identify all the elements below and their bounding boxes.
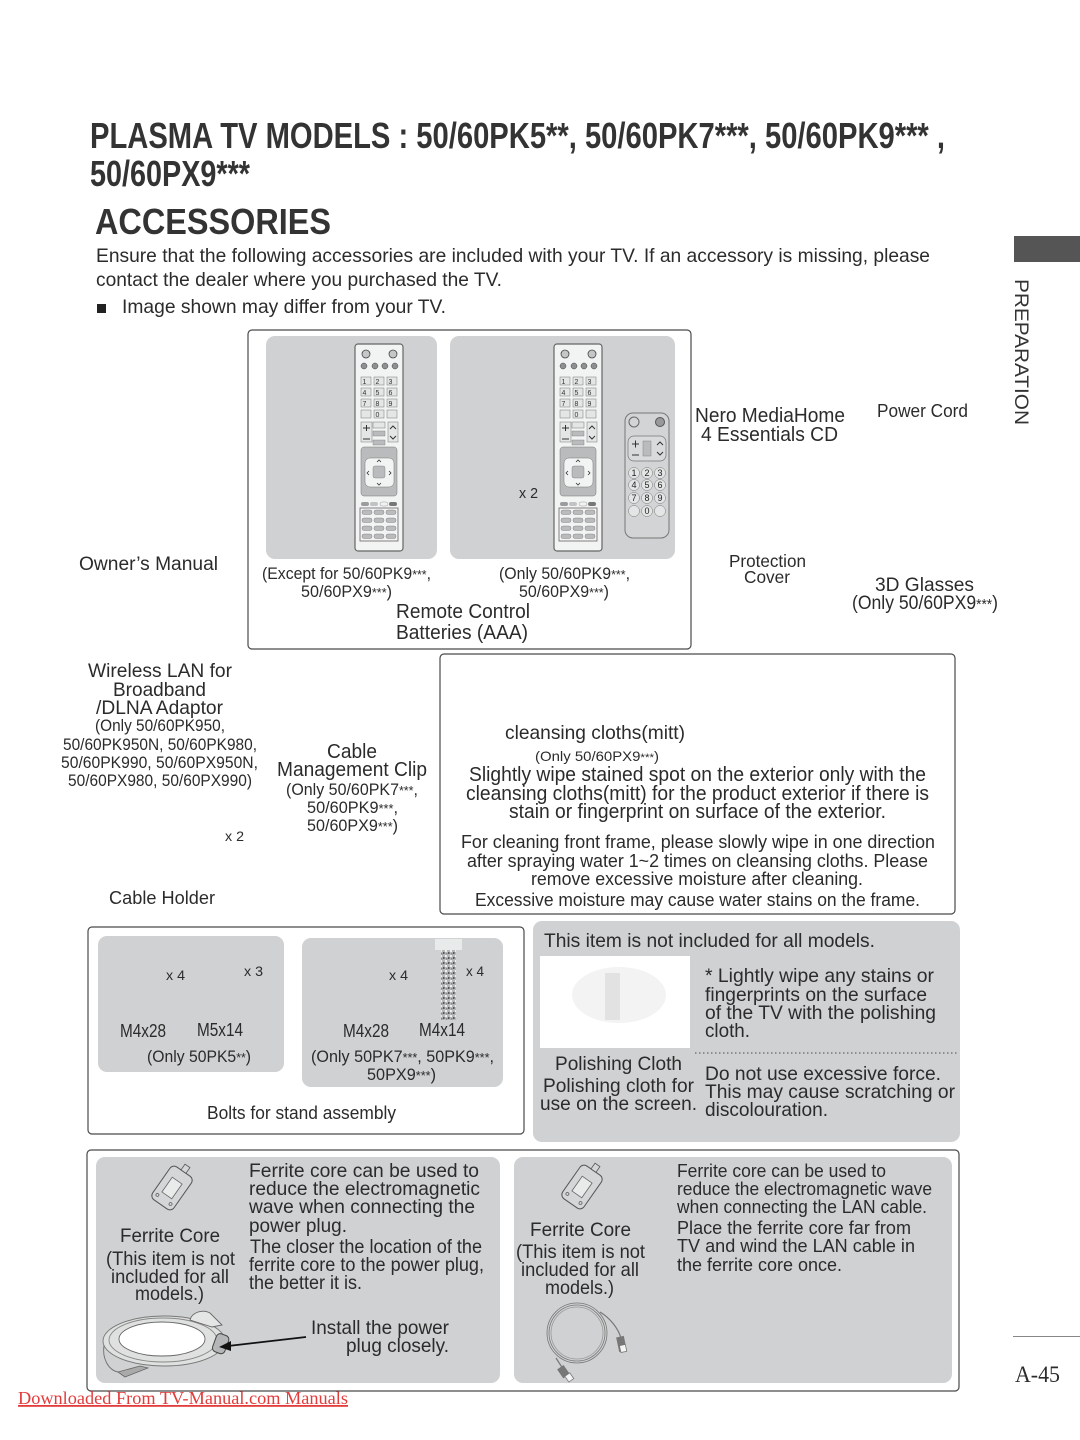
label: install closely: Install the power [311,1317,449,1339]
panel: 50PK7 50PK9 50PX9 bolts: M4x14 [419,1020,465,1040]
text: front frame instructions [461,831,935,910]
label: polishing cloth: Polishing cloth for [543,1075,694,1097]
remote captions: Remote Control [396,601,530,623]
label: wireless LAN adaptor: 50/60PK950N, 50/60PK980, [63,735,257,754]
label: protection cover: Cover [744,567,790,587]
panel: 50PK5 bolts: x 3 [244,963,263,979]
icon: ferrite core [150,1158,198,1212]
label: cable management clip: Cable [327,741,377,763]
icon: ferrite core [560,1157,608,1211]
label: ferrite core: (This item is not [516,1241,646,1263]
footer source link: Downloaded From TV-Manual.com Manuals [18,1388,348,1408]
caption: bolts: Bolts for stand assembly [207,1103,396,1123]
label: 3D glasses: 3D Glasses [875,575,974,596]
heading: cleansing cloths: cleansing cloths(mitt) [505,722,685,744]
label: wireless LAN adaptor: 50/60PK990, 50/60PX950N, [61,753,258,772]
text: ferrite LAN description [676,1160,932,1275]
panel: 50PK7 50PK9 50PX9 bolts [302,938,503,1087]
text: ferrite power plug description: the better it is. [249,1272,362,1294]
text: wipe instructions: Slightly wipe stained spot on the exterior only with the [469,764,926,786]
label: wireless LAN adaptor: 50/60PX980, 50/60PX990) [68,771,252,790]
label: ferrite core: Ferrite Core [530,1219,631,1241]
text: ferrite LAN description: reduce the electromagnetic wave [677,1178,932,1199]
text: wipe instructions: cleansing cloths(mitt) for the product exterior if there is [466,783,929,805]
label: ferrite core: included for all [521,1259,639,1281]
text: ferrite power plug description: Ferrite core can be used to [249,1160,479,1182]
remote captions: 50/60PX9***) [301,582,392,601]
label: ferrite core: models.) [545,1277,614,1299]
label: polishing cloth: Polishing Cloth [555,1053,682,1075]
text: force warning: Do not use excessive force. [705,1063,941,1085]
icon: small remote: 6 [657,480,663,490]
panel: 50PK7 50PK9 50PX9 bolts: x 4 [466,963,484,979]
label: 3D glasses: (Only 50/60PX9***) [852,593,998,614]
text: force warning: This may cause scratching or [705,1081,955,1103]
text: force warning [705,1063,955,1121]
page number: A-45 [1015,1362,1060,1387]
remote captions: (Only 50/60PK9***, [499,564,630,583]
text: wipe tip: fingerprints on the surface [705,984,927,1006]
panel: 50PK5 bolts: x 4 [166,967,185,983]
text: ferrite LAN description: when connecting the LAN cable. [676,1196,927,1217]
icon: LAN cable [547,1303,627,1382]
text: wipe tip: of the TV with the polishing [705,1002,936,1024]
label: ferrite core: models.) [135,1283,204,1305]
icon: small remote: 7 [631,493,637,503]
panel: standard remote [266,336,437,559]
label: cable holder quantity: x 2 [225,828,244,844]
text: front frame instructions: after spraying water 1~2 times on cleansing cloths. Please [467,850,928,871]
label: cable management clip: Management Clip [277,759,427,781]
panel: ferrite cores [87,1150,959,1391]
text: wipe instructions: stain or fingerprint on surface of the exterior. [509,801,886,823]
text: front frame instructions: remove excessive moisture after cleaning. [531,868,863,889]
label: ferrite core: (This item is not [106,1248,236,1270]
icon: small remote: 2 [644,468,650,478]
panel: 50PK7 50PK9 50PX9 bolts: (Only 50PK7***, 50PK9***, [311,1047,494,1066]
panel: 50PK7 50PK9 50PX9 bolts: M4x28 [343,1021,389,1041]
text: ferrite power plug description [248,1160,484,1294]
label: polishing cloth [540,1053,697,1115]
icon: polishing cloth [540,956,690,1048]
label: cable management clip: 50/60PX9***) [307,816,398,835]
panel: remote control and batteries [248,330,691,649]
text: ferrite power plug description: The closer the location of the [250,1236,482,1258]
icon: remote control [355,344,403,551]
label: polishing cloth: use on the screen. [540,1093,697,1115]
icon: screw [435,939,462,1020]
label: install closely: plug closely. [346,1335,449,1357]
icon: small remote: 4 [631,480,637,490]
label: wireless LAN adaptor: /DLNA Adaptor [96,697,223,719]
icon: small remote: 0 [644,506,650,516]
panel: 3D models remotes [450,336,675,559]
text: wipe instructions [466,764,929,823]
text: ferrite LAN description: Place the ferrite core far from [677,1217,911,1238]
panel: 50PK5 bolts: M4x28 [120,1021,166,1041]
note: model restriction: (Only 50/60PX9 ***) [535,748,659,764]
remote captions: 50/60PX9***) [519,582,609,601]
label: wireless LAN adaptor [61,660,258,790]
title: plasma TV models [90,115,945,194]
text: wipe tip [705,965,936,1042]
remote captions [262,564,630,644]
icon: small remote: 3 [657,468,663,478]
label: install closely [311,1317,449,1357]
sidebar: section label: PREPARATION [1010,279,1032,425]
text: front frame instructions: For cleaning front frame, please slowly wipe in one direction [461,831,935,852]
icon: small remote: 9 [657,493,663,503]
label: 3D glasses [852,575,998,614]
intro text: Ensure that the following accessories are included with your TV. If an accessory is missing, please [96,245,930,267]
text: ferrite LAN description: the ferrite core once. [677,1254,842,1275]
panel: cleansing cloths [440,654,955,914]
title: plasma TV models: 50/60PX9*** [90,153,250,194]
heading: not included: This item is not included for all models. [544,930,875,952]
label: Nero MediaHome CD [695,405,845,446]
icon: small remote: 5 [644,480,650,490]
remote captions: Batteries (AAA) [396,622,528,644]
text: ferrite power plug description: power plug. [249,1215,347,1237]
label: wireless LAN adaptor: (Only 50/60PK950, [95,716,225,735]
label: protection cover [729,551,806,587]
text: wipe tip: cloth. [705,1020,750,1042]
label: Nero MediaHome CD: Nero MediaHome [695,405,845,427]
intro text [96,245,930,318]
label: ferrite core [106,1225,236,1305]
panel: bolts for stand assembly [88,927,524,1134]
arrow: to ferrite core on plug [219,1337,306,1351]
text: ferrite power plug description: wave when connecting the [248,1196,475,1218]
label: wireless LAN adaptor: Broadband [113,679,206,701]
panel: power plug ferrite core [96,1157,500,1383]
icon: remote control [554,344,602,551]
label: Nero MediaHome CD: 4 Essentials CD [701,424,838,446]
text: ferrite LAN description: Ferrite core can be used to [677,1160,886,1181]
icon: small remote: 1 [631,468,637,478]
intro text: Image shown may differ from your TV. [122,296,446,318]
text: ferrite power plug description: ferrite core to the power plug, [249,1254,484,1276]
panel: 50PK7 50PK9 50PX9 bolts: 50PX9***) [367,1065,436,1084]
panel: polishing cloth [533,921,960,1142]
label: cable holder: Cable Holder [109,888,215,908]
sidebar: section tab [1014,236,1080,262]
remote captions: (Except for 50/60PK9***, [262,564,431,583]
panel: 50PK7 50PK9 50PX9 bolts: x 4 [389,967,408,983]
intro text: contact the dealer where you purchased the TV. [96,269,502,291]
text: wipe tip: * Lightly wipe any stains or [705,965,934,987]
quantity label: x 2 [519,486,538,502]
text: front frame instructions: Excessive moisture may cause water stains on the frame. [475,889,920,910]
text: ferrite power plug description: reduce the electromagnetic [249,1178,480,1200]
label: cable management clip: 50/60PK9***, [307,798,398,817]
text: force warning: discolouration. [705,1099,828,1121]
panel: 50PK5 bolts [98,936,284,1072]
icon: coiled power cord [103,1311,230,1377]
icon: small remote: 8 [644,493,650,503]
label: ferrite core: included for all [111,1266,229,1288]
label: protection cover: Protection [729,551,806,571]
label: cable management clip: (Only 50/60PK7***, [286,780,418,799]
label: power cord: Power Cord [877,401,968,421]
panel: 50PK5 bolts: (Only 50PK5**) [147,1047,251,1066]
text: ferrite LAN description: TV and wind the LAN cable in [677,1235,915,1256]
label: owner's manual: Owner’s Manual [79,554,218,575]
panel: LAN ferrite core [514,1157,952,1383]
panel: 50PK5 bolts: M5x14 [197,1020,243,1040]
label: wireless LAN adaptor: Wireless LAN for [88,660,232,682]
heading: accessories: ACCESSORIES [95,201,331,242]
label: ferrite core [516,1219,646,1299]
label: cable management clip [277,741,427,835]
label: ferrite core: Ferrite Core [120,1225,220,1247]
icon: small remote [625,413,669,538]
